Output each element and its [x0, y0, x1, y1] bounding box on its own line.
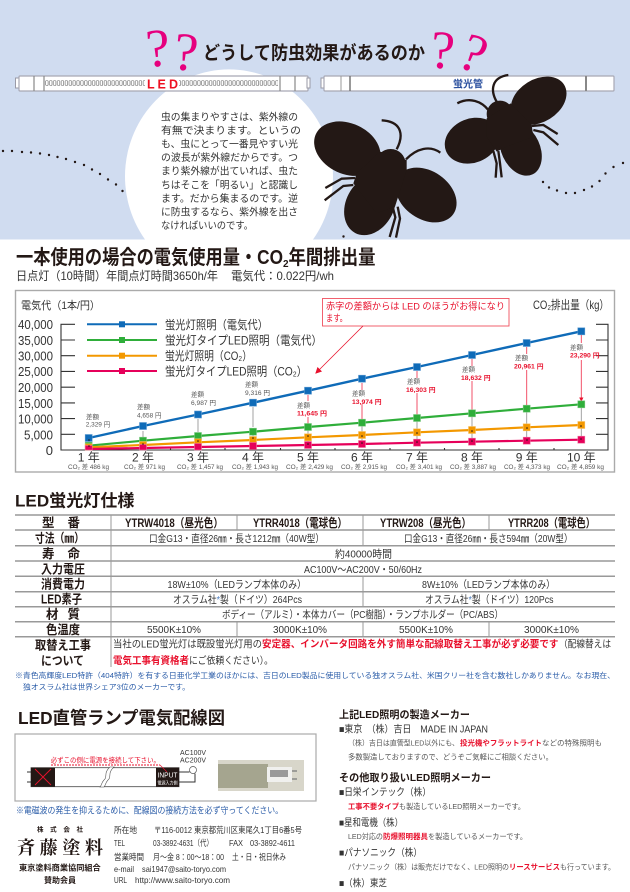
- x axis year labels: 5 年: [297, 450, 319, 464]
- white oval: [125, 69, 333, 240]
- y axis labels: 5,000: [24, 428, 53, 442]
- Nichiei entry: ■日栄インテック（株）: [339, 786, 431, 798]
- heading: LED直管ランプ電気配線図: [18, 708, 225, 728]
- x axis CO2 differences: [68, 463, 604, 471]
- right cap: [156, 768, 179, 787]
- x axis CO2 differences: CO₂ 差 3,401 kg: [396, 463, 442, 471]
- legend: 蛍光灯タイプLED照明（CO₂）: [165, 364, 307, 378]
- fluorescent tube: [321, 76, 614, 91]
- model row: YTRW4018（昼光色）: [125, 515, 223, 530]
- model row: YTRW208（昼光色）: [380, 515, 471, 530]
- y axis labels: 25,000: [18, 364, 53, 379]
- difference labels: 11,645 円: [297, 410, 328, 418]
- Yoshinichi entry: 多数製造しておりますので、どうぞご気軽にご相談ください。: [348, 752, 553, 762]
- x axis CO2 differences: CO₂ 差 971 kg: [124, 463, 165, 471]
- Seiwa entry: を製造しているメーカーです。: [428, 831, 527, 841]
- value rows: 3000K±10%: [273, 624, 327, 636]
- icon: question marks: ?: [428, 19, 457, 81]
- wiring diagram: INPUT: [158, 772, 178, 780]
- Nichiei entry: 工事不要タイプ: [348, 801, 399, 811]
- y axis labels: 20,000: [18, 380, 53, 395]
- x axis CO2 differences: CO₂ 差 1,943 kg: [232, 463, 278, 471]
- replacement work note: 安定器、インバータ回路を外す簡単な配線取替え工事が必ず必要です: [262, 638, 558, 650]
- difference labels: 差額: [407, 376, 420, 386]
- title: どうして防虫効果があるのか: [203, 42, 425, 64]
- Nichiei entry: も製造しているLED照明メーカーです。: [399, 801, 525, 811]
- difference labels: 20,961 円: [514, 362, 544, 370]
- value rows: 5500K±10%: [147, 624, 201, 636]
- x axis CO2 differences: CO₂ 差 2,429 kg: [286, 463, 333, 471]
- value rows: 18W±10%（LEDランプ本体のみ）: [168, 578, 306, 591]
- callout: [316, 298, 509, 373]
- contact details: 月〜金 8：00〜18：00: [153, 852, 224, 862]
- other makers heading: その他取り扱いLED照明メーカー: [339, 771, 491, 784]
- right axis title: CO₂排出量（kg）: [533, 298, 609, 312]
- row labels: [35, 516, 91, 668]
- x axis CO2 differences: CO₂ 差 4,373 kg: [504, 463, 550, 471]
- explanation text: ちはそこを「明るい」と認識し: [161, 180, 298, 192]
- specification table: [15, 515, 615, 668]
- dotted flight path left: [2, 150, 124, 192]
- Seiwa entry: LED対応の: [348, 831, 383, 841]
- heading: 2: [283, 259, 289, 270]
- row labels: 寸法（㎜）: [35, 530, 84, 546]
- contact details: http://www.saito-toryo.com: [135, 875, 230, 885]
- tube break: [100, 767, 114, 787]
- legend: 蛍光灯照明（電気代）: [165, 317, 268, 332]
- contact details: URL: [114, 875, 127, 885]
- icon: question marks: [144, 17, 496, 86]
- difference labels: 4,658 円: [137, 412, 162, 420]
- y axis labels: 30,000: [18, 348, 53, 364]
- explanation text: 虫の集まりやすさは、紫外線の: [161, 110, 298, 124]
- axes: [61, 324, 608, 450]
- difference labels: 差額: [86, 412, 100, 421]
- explanation text: も、虫にとって一番見やすい光: [161, 138, 298, 150]
- Panasonic entry: パナソニック（株）は販売だけでなく、LED照明の: [348, 861, 509, 871]
- x axis CO2 differences: CO₂ 差 2,915 kg: [341, 463, 387, 471]
- LED label: L E D: [147, 78, 178, 92]
- x axis CO2 differences: CO₂ 差 486 kg: [68, 463, 109, 471]
- Seiwa entry: [339, 816, 527, 841]
- contact details: 03-3892-4611: [250, 838, 295, 848]
- value rows: 口金G13・直径26㎜・長さ1212㎜（40W型）: [149, 532, 324, 545]
- row labels: 寿 命: [42, 546, 80, 561]
- Panasonic entry: リースサービス: [509, 861, 560, 871]
- company logo text: 賛助会員: [44, 875, 76, 885]
- Nichiei entry: [339, 786, 525, 811]
- difference labels: 差額: [570, 342, 584, 352]
- value rows: ボディー（アルミ）・本体カバー（PC樹脂）・ランプホルダー（PC/ABS）: [222, 608, 503, 621]
- Panasonic entry: [339, 846, 615, 871]
- explanation text: なければいいのです。: [161, 220, 253, 232]
- contact details: 営業時間: [114, 852, 144, 862]
- explanation text: [161, 110, 301, 232]
- pins and circuit: [27, 772, 195, 782]
- difference labels: 16,303 円: [406, 386, 436, 394]
- difference labels: 差額: [515, 353, 528, 362]
- x axis year labels: 1 年: [78, 450, 100, 464]
- Panasonic entry: も行っています。: [560, 861, 615, 871]
- series: LED CO2: [85, 436, 585, 450]
- subheading: [16, 268, 334, 283]
- Yoshinichi entry: などの特殊照明も: [542, 738, 602, 748]
- replacement work note: 当社のLED蛍光灯は既設蛍光灯用の: [113, 638, 262, 650]
- row labels: 型 番: [42, 516, 80, 530]
- difference labels: 差額: [297, 400, 310, 410]
- dotted flight path right: [342, 162, 624, 238]
- y axis labels: [18, 317, 53, 458]
- row labels: 消費電力: [41, 576, 85, 592]
- Seiwa entry: ■星和電機（株）: [339, 816, 403, 829]
- difference labels: 13,974 円: [352, 398, 382, 406]
- footnote: [15, 670, 615, 692]
- x axis year labels: 6 年: [351, 450, 373, 464]
- contact details: 土・日・祝日休み: [232, 852, 286, 862]
- Panasonic entry: ■パナソニック（株）: [339, 846, 422, 859]
- diagram frame: [15, 734, 316, 801]
- small black markers on lower series: [88, 425, 582, 447]
- subheading: 日点灯（10時間）年間点灯時間3650h/年: [16, 269, 218, 283]
- series: LED electricity: [85, 401, 585, 449]
- heading: 一本使用の場合の電気使用量・CO: [16, 246, 283, 269]
- left cap with cross: [31, 768, 55, 787]
- x axis year labels: 7 年: [406, 450, 428, 464]
- model row: [125, 515, 595, 530]
- difference labels: 差額: [245, 380, 258, 388]
- Seiwa entry: 防爆照明器具: [383, 831, 428, 841]
- x axis year labels: 10 年: [567, 450, 596, 464]
- wiring diagram: AC200V: [180, 758, 206, 764]
- x axis year labels: 9 年: [516, 450, 538, 464]
- fluorescent label: 蛍光管: [453, 78, 483, 90]
- value rows: 口金G13・直径26㎜・長さ594㎜（20W型）: [404, 532, 572, 545]
- Yoshinichi entry: 投光機やフラットライト: [460, 738, 542, 748]
- panel: why insect-proof: [0, 0, 630, 244]
- icon: large insect silhouette: [305, 111, 467, 244]
- panel: LED manufacturers: [339, 708, 615, 890]
- manufacturer heading: 上記LED照明の製造メーカー: [339, 708, 470, 721]
- row labels: について: [41, 654, 84, 668]
- value rows: [147, 532, 579, 636]
- x axis year labels: 8 年: [461, 450, 483, 464]
- y axis labels: 35,000: [18, 333, 53, 348]
- subheading: 電気代：0.022円/wh: [231, 268, 334, 283]
- value rows: 3000K±10%: [524, 624, 579, 636]
- difference labels: 差額: [191, 390, 204, 398]
- model row: YTRR208（電球色）: [508, 515, 595, 530]
- contact details: e-mail: [114, 864, 134, 874]
- icon: question marks: ?: [171, 21, 201, 83]
- wiring diagram: [27, 750, 206, 787]
- left axis title: 電気代（1本/円）: [21, 298, 100, 312]
- LED tube: [16, 76, 310, 92]
- legend: 蛍光灯照明（CO₂）: [165, 349, 252, 363]
- company logo text: 株式会社: [37, 824, 84, 834]
- photo: lamp end: [218, 760, 304, 791]
- Yoshinichi entry: ■東京 （株）吉日 MADE IN JAPAN: [339, 723, 488, 736]
- difference labels: 18,632 円: [461, 374, 491, 382]
- y axis labels: 0: [46, 443, 53, 458]
- contact details: 03-3892-4631（代）: [153, 838, 213, 848]
- replacement work note: にご依頼ください）。: [189, 654, 273, 667]
- difference arrows grey: [89, 407, 581, 450]
- series: fluorescent electricity: [85, 328, 585, 442]
- footnote: ※青色高輝度LED特許（404特許）を有する日亜化学工業のほかには、吉日のLED製品に使用している独オスラム社、米国クリー社を含む数社しかありません。なお現在、: [15, 670, 615, 680]
- heading: 年間排出量: [288, 246, 376, 269]
- panel: wiring diagram: [15, 708, 316, 816]
- wiring note: ※電磁波の発生を抑えるために、配線図の接続方法を必ず守ってください。: [16, 804, 283, 816]
- row labels: 取替え工事: [35, 638, 91, 652]
- voltage labels: AC100V: [180, 750, 206, 757]
- contact details: TEL: [114, 838, 125, 848]
- value rows: オスラム社*製（ドイツ）264Pcs: [173, 593, 302, 606]
- footnote: 独オスラム社は世界シェア3位のメーカーです。: [23, 682, 190, 692]
- contact details: FAX: [229, 838, 243, 848]
- panel: electricity usage and CO2 section heading: [16, 246, 376, 283]
- row labels: 色温度: [46, 622, 80, 637]
- difference labels: 6,987 円: [191, 399, 216, 407]
- red instruction: 必ずこの側に電源を接続して下さい。: [51, 756, 160, 764]
- value rows: AC100V〜AC200V・50/60Hz: [304, 564, 422, 576]
- value rows: 8W±10%（LEDランプ本体のみ）: [422, 578, 555, 591]
- tube body: [31, 768, 179, 787]
- model row: YTRR4018（電球色）: [253, 515, 347, 530]
- company logo text: [17, 824, 103, 885]
- value rows: 約40000時間: [335, 547, 392, 560]
- value rows: 5500K±10%: [399, 624, 453, 636]
- Yoshinichi entry: （株）吉日は直管型LED以外にも、: [348, 738, 459, 748]
- x axis year labels: 2 年: [132, 450, 154, 464]
- row labels: 材 質: [46, 606, 80, 622]
- contact details: sai1947@saito-toryo.com: [142, 864, 226, 874]
- blue background band: [0, 0, 630, 240]
- company logo text: 斉藤塗料: [17, 837, 103, 858]
- contact details: 〒116-0012 東京都荒川区東尾久1丁目6番5号: [154, 825, 302, 835]
- difference labels: 23,290 円: [570, 352, 600, 360]
- Yoshinichi entry: [339, 723, 602, 762]
- wiring diagram: 電源入力側: [158, 780, 178, 786]
- row labels: 入力電圧: [41, 562, 85, 576]
- panel: LED specification: [15, 490, 615, 692]
- difference labels: 差額: [462, 364, 476, 374]
- x axis CO2 differences: CO₂ 差 3,887 kg: [450, 463, 496, 471]
- x axis CO2 differences: CO₂ 差 1,457 kg: [177, 463, 223, 471]
- explanation text: に防虫するなら、紫外線を出さ: [161, 206, 298, 218]
- explanation text: 有無で決まります。というの: [161, 124, 301, 137]
- difference labels: 9,316 円: [245, 389, 270, 397]
- Toshiba entry: ■（株）東芝: [339, 877, 387, 890]
- legend: [87, 317, 322, 378]
- replacement work note: （配線替えは: [559, 638, 611, 650]
- table rules: [15, 515, 615, 637]
- difference labels: 差額: [352, 388, 366, 398]
- x axis year labels: 4 年: [242, 450, 264, 464]
- difference arrows red: [308, 335, 581, 425]
- company block: [17, 824, 302, 885]
- explanation text: の波長が紫外線だからです。つ: [161, 151, 298, 164]
- y axis labels: 40,000: [18, 317, 53, 332]
- legend: 蛍光灯タイプLED照明（電気代）: [165, 332, 322, 347]
- callout: ます。: [326, 314, 347, 324]
- difference labels: 2,329 円: [86, 420, 110, 428]
- line chart: [16, 290, 614, 472]
- series: fluorescent CO2: [85, 422, 585, 450]
- replacement work note: [113, 638, 611, 667]
- x axis CO2 differences: CO₂ 差 4,859 kg: [557, 463, 604, 471]
- icon: small insect silhouette: [438, 67, 575, 183]
- explanation text: ます。だから集まるのです。逆: [161, 192, 298, 205]
- value rows: オスラム社*製（ドイツ）120Pcs: [425, 593, 554, 606]
- icon: question marks: ?: [144, 17, 172, 79]
- x axis year labels: 3 年: [187, 450, 209, 464]
- contact details: 所在地: [114, 825, 137, 835]
- icon: question marks: ?: [451, 21, 496, 86]
- contact details: [114, 825, 302, 885]
- explanation text: まり紫外線が出ていれば、虫た: [161, 164, 298, 178]
- callout: 赤字の差額からは LED のほうがお得になり: [326, 300, 505, 312]
- row labels: LED素子: [41, 592, 82, 606]
- difference labels: 差額: [137, 402, 150, 411]
- heading: LED蛍光灯仕様: [15, 490, 134, 510]
- y axis labels: 10,000: [18, 412, 53, 426]
- replacement work note: 電気工事有資格者: [113, 654, 189, 667]
- x axis year labels: [78, 450, 596, 464]
- callout arrow: [316, 326, 363, 373]
- company logo text: 東京塗料商業協同組合: [19, 862, 101, 872]
- y axis labels: 15,000: [18, 396, 53, 411]
- difference labels: [86, 342, 600, 428]
- chart frame: [16, 290, 614, 472]
